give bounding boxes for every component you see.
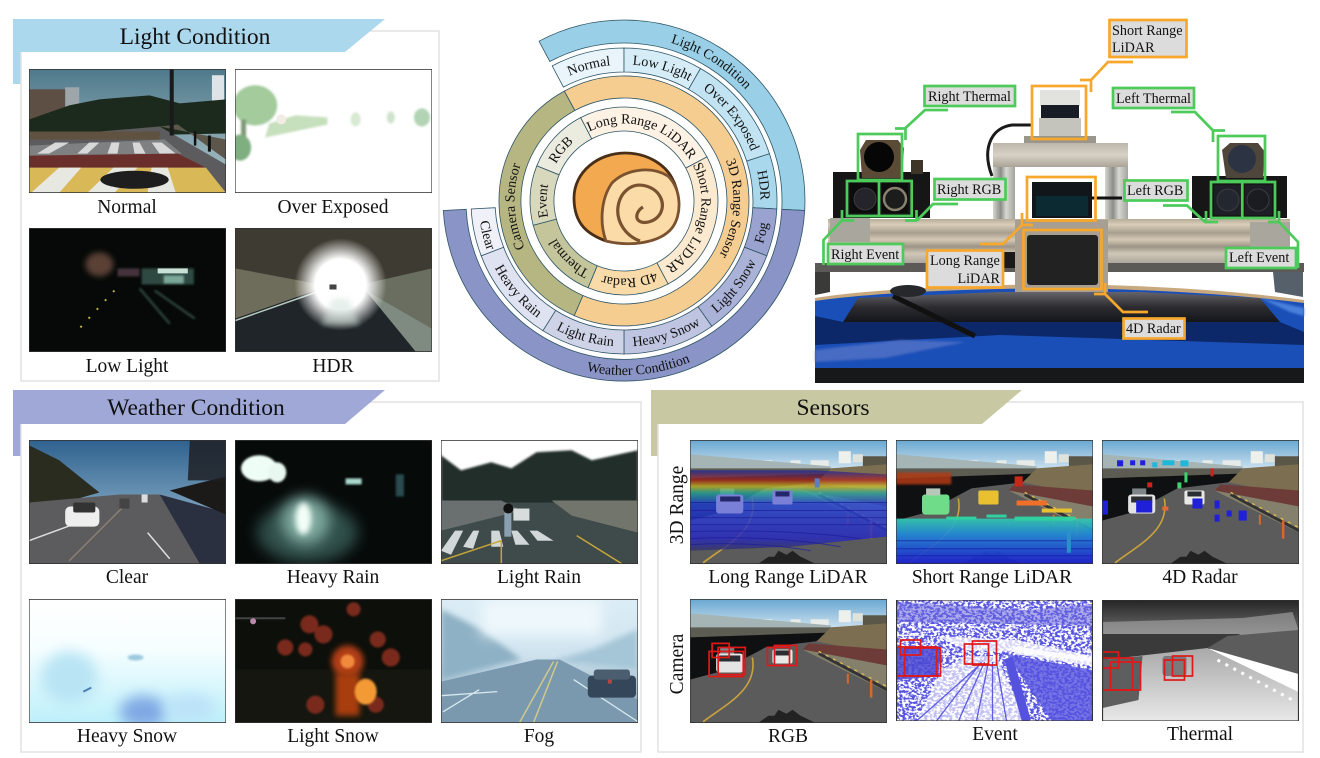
segment: event bbox=[530, 165, 560, 226]
photo: heavy rain bbox=[235, 440, 432, 564]
heading: weather condition bbox=[13, 390, 385, 424]
long range lidar unit bbox=[1032, 182, 1092, 218]
row label: camera: Camera bbox=[667, 633, 688, 694]
heading: sensors bbox=[651, 390, 1022, 424]
photo: over exposed bbox=[235, 69, 432, 193]
caption: light rain: Light Rain bbox=[497, 567, 581, 588]
segment: heavy rain bbox=[480, 246, 556, 332]
segment: over exposed: Over Exposed bbox=[704, 84, 760, 152]
photo: heavy snow bbox=[29, 599, 226, 723]
caption: thermal: Thermal bbox=[1167, 724, 1234, 745]
segment: low light bbox=[624, 48, 701, 90]
band: light condition bbox=[538, 20, 806, 211]
band: camera sensor: Camera Sensor bbox=[505, 162, 524, 250]
photo: normal bbox=[29, 69, 226, 193]
band: 3D range sensor bbox=[564, 76, 750, 326]
callout: long range lidar bbox=[927, 177, 1096, 288]
caption: low light: Low Light bbox=[86, 356, 169, 377]
segment: RGB bbox=[536, 117, 592, 176]
segment: fog bbox=[744, 207, 778, 256]
callout: 4D radar: 4D Radar bbox=[1126, 321, 1181, 337]
row label: 3D range: 3D Range bbox=[667, 466, 688, 544]
segment: event: Event bbox=[538, 184, 548, 218]
caption: RGB: RGB bbox=[768, 726, 808, 747]
panel: sensors bbox=[651, 390, 1303, 752]
band: camera sensor bbox=[498, 90, 584, 316]
callout: short range lidar: Short Range bbox=[1112, 23, 1183, 39]
caption: heavy snow: Heavy Snow bbox=[77, 726, 177, 747]
right camera module bbox=[833, 140, 930, 218]
heading: light condition bbox=[13, 19, 385, 52]
central plate and radar bbox=[1000, 220, 1108, 292]
callout: short range lidar: LiDAR bbox=[1112, 40, 1155, 56]
segment: normal bbox=[552, 48, 624, 88]
callout: right thermal: Right Thermal bbox=[928, 89, 1011, 105]
upper frame bbox=[988, 125, 1128, 219]
segment: heavy snow: Heavy Snow bbox=[632, 319, 698, 346]
callout: right RGB bbox=[847, 179, 1006, 221]
segment: light snow: Light Snow bbox=[710, 259, 755, 314]
caption: fog: Fog bbox=[524, 726, 554, 747]
callout: left thermal: Left Thermal bbox=[1116, 91, 1191, 107]
callout: left event: Left Event bbox=[1229, 250, 1289, 266]
callout: right RGB: Right RGB bbox=[937, 182, 1001, 198]
callout: left RGB bbox=[1124, 180, 1275, 222]
left camera module bbox=[1192, 143, 1287, 218]
heading: weather condition: Weather Condition bbox=[107, 395, 285, 421]
photo: RGB bbox=[690, 599, 887, 723]
segment: RGB: RGB bbox=[548, 137, 572, 164]
caption: event: Event bbox=[972, 724, 1018, 745]
segment: over exposed bbox=[688, 68, 770, 162]
segment: light snow bbox=[698, 246, 768, 327]
band: light condition: Light Condition bbox=[671, 34, 750, 90]
short range lidar unit bbox=[1039, 90, 1081, 136]
segment: light rain bbox=[542, 310, 624, 354]
callout: left RGB: Left RGB bbox=[1127, 183, 1183, 199]
band: 3D range sensor: 3D Range Sensor bbox=[720, 158, 742, 258]
caption: HDR: HDR bbox=[312, 356, 354, 377]
callout: long range lidar: LiDAR bbox=[957, 271, 1001, 287]
photo: long range lidar bbox=[690, 440, 887, 564]
segment: normal: Normal bbox=[566, 56, 610, 76]
callout: left event bbox=[1226, 211, 1298, 268]
car roof bbox=[815, 284, 1304, 383]
caption: long range lidar: Long Range LiDAR bbox=[708, 567, 868, 588]
segment: thermal bbox=[532, 218, 598, 288]
caption: light snow: Light Snow bbox=[287, 726, 379, 747]
segment: HDR bbox=[746, 153, 778, 210]
taxonomy wheel bbox=[442, 20, 806, 382]
band: weather condition: Weather Condition bbox=[588, 356, 690, 376]
callout: 4D radar bbox=[1024, 230, 1184, 338]
caption: over exposed: Over Exposed bbox=[277, 197, 389, 218]
heading: light condition: Light Condition bbox=[120, 24, 271, 50]
segment: heavy rain: Heavy Rain bbox=[494, 264, 540, 318]
photo: fog bbox=[441, 599, 638, 723]
photo: short range lidar bbox=[896, 440, 1093, 564]
photo: clear bbox=[29, 440, 226, 564]
caption: normal: Normal bbox=[97, 197, 157, 218]
photo: event bbox=[896, 600, 1093, 721]
segment: HDR: HDR bbox=[757, 170, 770, 200]
segment: thermal: Thermal bbox=[548, 238, 588, 278]
segment: heavy snow bbox=[624, 306, 712, 354]
photo: 4D radar bbox=[1102, 440, 1299, 564]
panel: weather condition bbox=[13, 390, 641, 752]
icon: swiss roll bbox=[574, 153, 679, 244]
heading: sensors: Sensors bbox=[796, 395, 870, 421]
callout: long range lidar: Long Range bbox=[930, 253, 1000, 269]
photo: HDR bbox=[235, 228, 432, 352]
segment: 4D radar: 4D Radar bbox=[601, 274, 656, 288]
segment: light rain: Light Rain bbox=[556, 322, 614, 346]
sensor rig photo bbox=[815, 20, 1304, 383]
photo: light snow bbox=[235, 599, 432, 723]
caption: heavy rain: Heavy Rain bbox=[287, 567, 380, 588]
segment: long range lidar: Long Range LiDAR bbox=[586, 114, 696, 160]
band: weather condition bbox=[442, 208, 806, 382]
photo: light rain bbox=[441, 440, 638, 564]
segment: clear bbox=[470, 207, 504, 256]
callout: short range lidar bbox=[1032, 20, 1186, 139]
segment: clear: Clear bbox=[480, 221, 494, 250]
photo: thermal bbox=[1102, 600, 1299, 721]
caption: 4D radar: 4D Radar bbox=[1162, 567, 1238, 588]
callout: right thermal bbox=[858, 86, 1015, 180]
segment: short range lidar: Short Range LiDAR bbox=[666, 162, 711, 272]
photo: low light bbox=[29, 228, 226, 352]
segment: low light: Low Light bbox=[632, 56, 692, 81]
segment: 4D radar bbox=[588, 262, 669, 296]
caption: short range lidar: Short Range LiDAR bbox=[912, 567, 1072, 588]
caption: clear: Clear bbox=[106, 567, 149, 588]
callout: right event: Right Event bbox=[831, 247, 899, 263]
segment: fog: Fog bbox=[754, 222, 770, 244]
callout: right event bbox=[824, 210, 903, 265]
panel: light condition bbox=[13, 19, 439, 381]
callout: left thermal bbox=[1113, 88, 1265, 181]
rail bbox=[815, 218, 1304, 297]
